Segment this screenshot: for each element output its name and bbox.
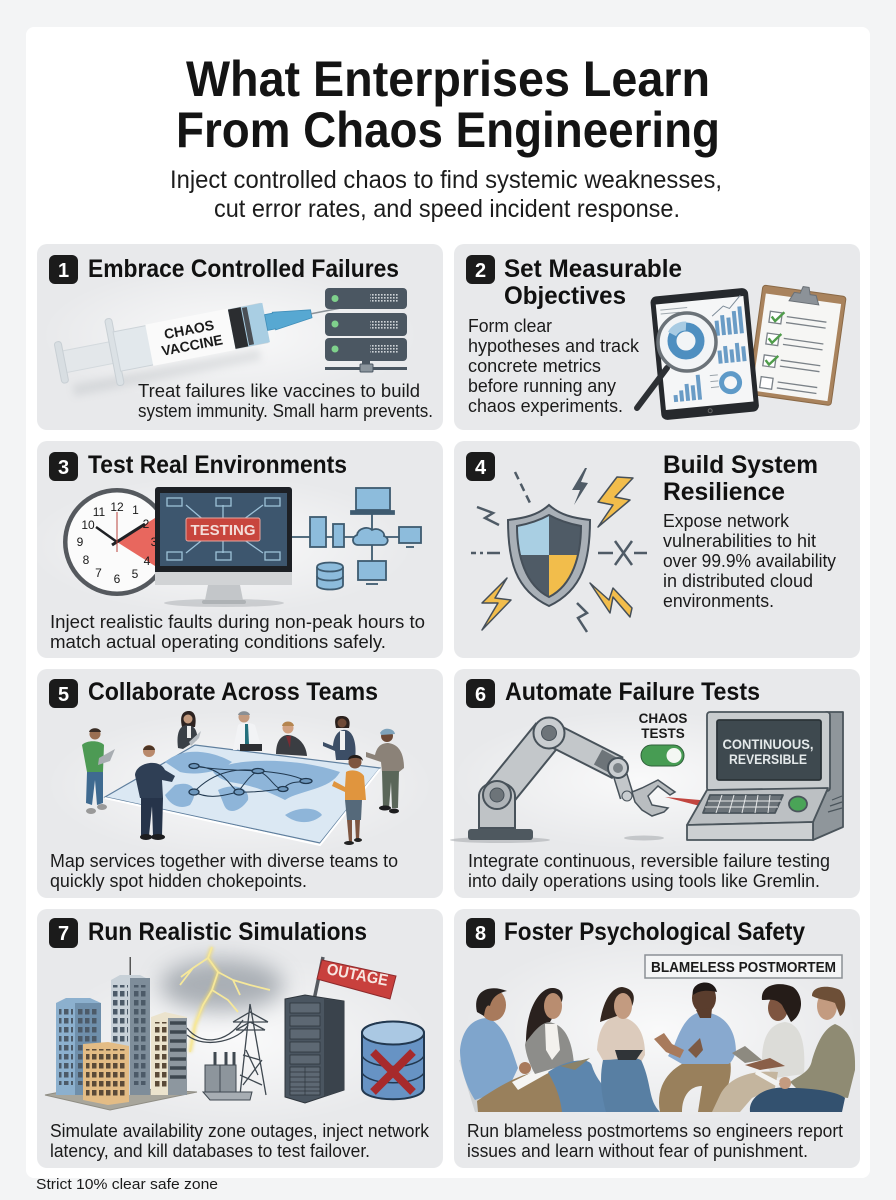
text 4: over 99.9% availability: [663, 551, 836, 571]
person: woman with tablet: [712, 984, 804, 1112]
icon: monitor showing testing: [155, 487, 292, 607]
icon: monitor showing testing: TESTING: [190, 522, 256, 539]
person: suit standing front: [135, 745, 175, 840]
icon: world map table: [105, 745, 380, 845]
badge 5: 5: [58, 684, 69, 706]
badge 3: 3: [58, 457, 69, 479]
icon: tablet with charts: [650, 288, 759, 420]
panel: 3 Test Real Environments: [25, 441, 443, 658]
badge 2: 2: [475, 260, 486, 282]
icon: server stack: [325, 288, 407, 372]
icon: wall clock: 12: [110, 500, 124, 514]
seated group: [459, 982, 855, 1112]
footer note: Strict 10% clear safe zone: [36, 1177, 218, 1193]
panel: 2 Set Measurable Objectives: [454, 244, 860, 430]
person: man with teal tie: [233, 711, 262, 751]
icon: wall clock: 1: [132, 503, 139, 517]
heading 4: [663, 451, 818, 506]
person: man in blue shirt gesturing: [654, 982, 736, 1112]
person: woman in navy blazer: [323, 716, 356, 760]
icon: server rack with outage flag: OUTAGE: [325, 961, 390, 990]
badge 1: 1: [58, 260, 69, 282]
badge 6: 6: [475, 684, 486, 706]
badge 4: 4: [475, 457, 487, 479]
title: What Enterprises Learn: [186, 51, 710, 107]
subtitle: cut error rates, and speed incident response.: [214, 195, 680, 223]
heading 5: Collaborate Across Teams: [88, 678, 378, 706]
icon: database with red X: [362, 1022, 424, 1099]
icon: city buildings: [45, 957, 197, 1110]
icon: server rack with outage flag: [285, 957, 396, 1103]
people around the map: [82, 711, 404, 845]
text 7: [50, 1121, 430, 1161]
person: blond man in dark suit: [276, 722, 307, 756]
text 2: Form clear: [468, 316, 552, 336]
icon: storm cloud and lightning: [160, 947, 284, 1052]
text 6: into daily operations using tools like Gremlin.: [468, 871, 820, 891]
icon: robot arm: [450, 718, 675, 843]
heading 2: [504, 255, 682, 310]
heading 7: Run Realistic Simulations: [88, 918, 367, 946]
icon: clipboard checklist: [748, 281, 847, 406]
icon: wall clock: 4: [144, 554, 151, 568]
text 8: issues and learn without fear of punishment.: [467, 1141, 808, 1161]
text 1: [138, 381, 433, 421]
badge 2: [466, 255, 495, 284]
icon: syringe labelled chaos vaccine: CHAOS: [163, 317, 215, 342]
badge 7: 7: [58, 923, 69, 945]
title: [176, 51, 720, 158]
sign: blameless postmortem: [645, 955, 842, 978]
badge 8: [466, 918, 495, 948]
icon: shield: [508, 505, 590, 606]
badge 5: [49, 679, 78, 708]
panel: 6 Automate Failure Tests: [450, 669, 860, 898]
heading 4: Build System: [663, 451, 818, 479]
screen text: CONTINUOUS,: [722, 737, 814, 752]
icon: wall clock: 5: [132, 567, 139, 581]
person: woman in orange top: [332, 755, 366, 845]
person: woman in grey blazer: [525, 988, 630, 1112]
text 6: [468, 851, 830, 891]
icon: dark lightning bolt and fault marks: [471, 468, 647, 632]
text 3: match actual operating conditions safely.: [50, 632, 386, 652]
text 1: Treat failures like vaccines to build: [138, 381, 420, 401]
badge 6: [466, 679, 495, 708]
text 6: Integrate continuous, reversible failure testing: [468, 851, 830, 871]
heading 8: Foster Psychological Safety: [504, 918, 805, 946]
heading 6: Automate Failure Tests: [505, 678, 760, 706]
person: man in cap: [366, 729, 404, 814]
icon: retro computer terminal: [687, 712, 843, 840]
panel: 5 Collaborate Across Teams: [37, 669, 443, 898]
person: green sweater with laptop: [82, 728, 115, 814]
label: chaos tests toggle: [639, 711, 687, 766]
icon: syringe labelled chaos vaccine: [52, 274, 353, 398]
text 1: system immunity. Small harm prevents.: [138, 401, 433, 421]
text 5: quickly spot hidden chokepoints.: [50, 871, 307, 891]
person: man in blue sweater: [459, 988, 582, 1112]
title: From Chaos Engineering: [176, 102, 720, 158]
icon: wall clock: 2: [143, 517, 150, 531]
text 7: Simulate availability zone outages, inject network: [50, 1121, 430, 1141]
text 4: Expose network: [663, 511, 790, 531]
text 2: [468, 316, 640, 416]
heading 1: Embrace Controlled Failures: [88, 255, 399, 283]
person: woman with tablet: [177, 711, 201, 749]
screen text: REVERSIBLE: [729, 752, 807, 767]
badge 4: [466, 452, 495, 481]
icon: wall clock: 9: [77, 535, 84, 549]
heading 2: Objectives: [504, 282, 626, 310]
text 5: Map services together with diverse teams to: [50, 851, 398, 871]
badge 3: [49, 452, 78, 481]
panel: 1 Embrace Controlled Failures: [37, 244, 443, 430]
badge 1: [49, 255, 78, 284]
text 8: Run blameless postmortems so engineers report: [467, 1121, 843, 1141]
icon: syringe labelled chaos vaccine: VACCINE: [160, 331, 224, 359]
icon: network diagram: [292, 488, 421, 590]
text 5: [50, 851, 398, 891]
icon: wall clock: 10: [81, 518, 95, 532]
text 7: latency, and kill databases to test failover.: [50, 1141, 370, 1161]
label: chaos tests toggle: TESTS: [641, 726, 685, 741]
icon: wall clock: [63, 488, 171, 596]
red laser beam: [665, 797, 700, 806]
icon: wall clock: 6: [114, 572, 121, 586]
icon: wall clock: 11: [93, 505, 106, 519]
icon: transformer and pylon: [187, 1004, 268, 1100]
text 8: [467, 1121, 843, 1161]
text 2: before running any: [468, 376, 616, 396]
icon: wall clock: 7: [95, 566, 102, 580]
heading 4: Resilience: [663, 478, 785, 506]
text 4: [663, 511, 836, 611]
icon: yellow lightning bolts: [482, 477, 633, 630]
text 3: Inject realistic faults during non-peak hours to: [50, 612, 425, 632]
sign: blameless postmortem: BLAMELESS POSTMORTEM: [651, 960, 836, 976]
text 3: [50, 612, 425, 652]
person: woman in beige blouse: [597, 987, 660, 1112]
subtitle: [170, 166, 722, 223]
text 2: chaos experiments.: [468, 396, 623, 416]
icon: magnifying glass: [637, 313, 716, 408]
text 2: hypotheses and track: [468, 336, 640, 356]
panel: 8 Foster Psychological Safety: [454, 909, 860, 1168]
text 4: vulnerabilities to hit: [663, 531, 816, 551]
badge 7: [49, 918, 78, 948]
panel: 7 Run Realistic Simulations: [37, 909, 443, 1168]
text 4: in distributed cloud: [663, 571, 813, 591]
heading 3: Test Real Environments: [88, 451, 347, 479]
panel: 4 Build System Resilience: [454, 441, 860, 658]
text 4: environments.: [663, 591, 774, 611]
text 2: concrete metrics: [468, 356, 601, 376]
heading 2: Set Measurable: [504, 255, 682, 283]
person: man in olive shirt: [750, 987, 855, 1112]
icon: wall clock: 8: [83, 553, 90, 567]
icon: wall clock: 3: [151, 535, 158, 549]
label: chaos tests toggle: CHAOS: [639, 711, 687, 726]
subtitle: Inject controlled chaos to find systemic weaknesses,: [170, 166, 722, 194]
badge 8: 8: [475, 923, 486, 945]
screen text: [722, 737, 814, 767]
